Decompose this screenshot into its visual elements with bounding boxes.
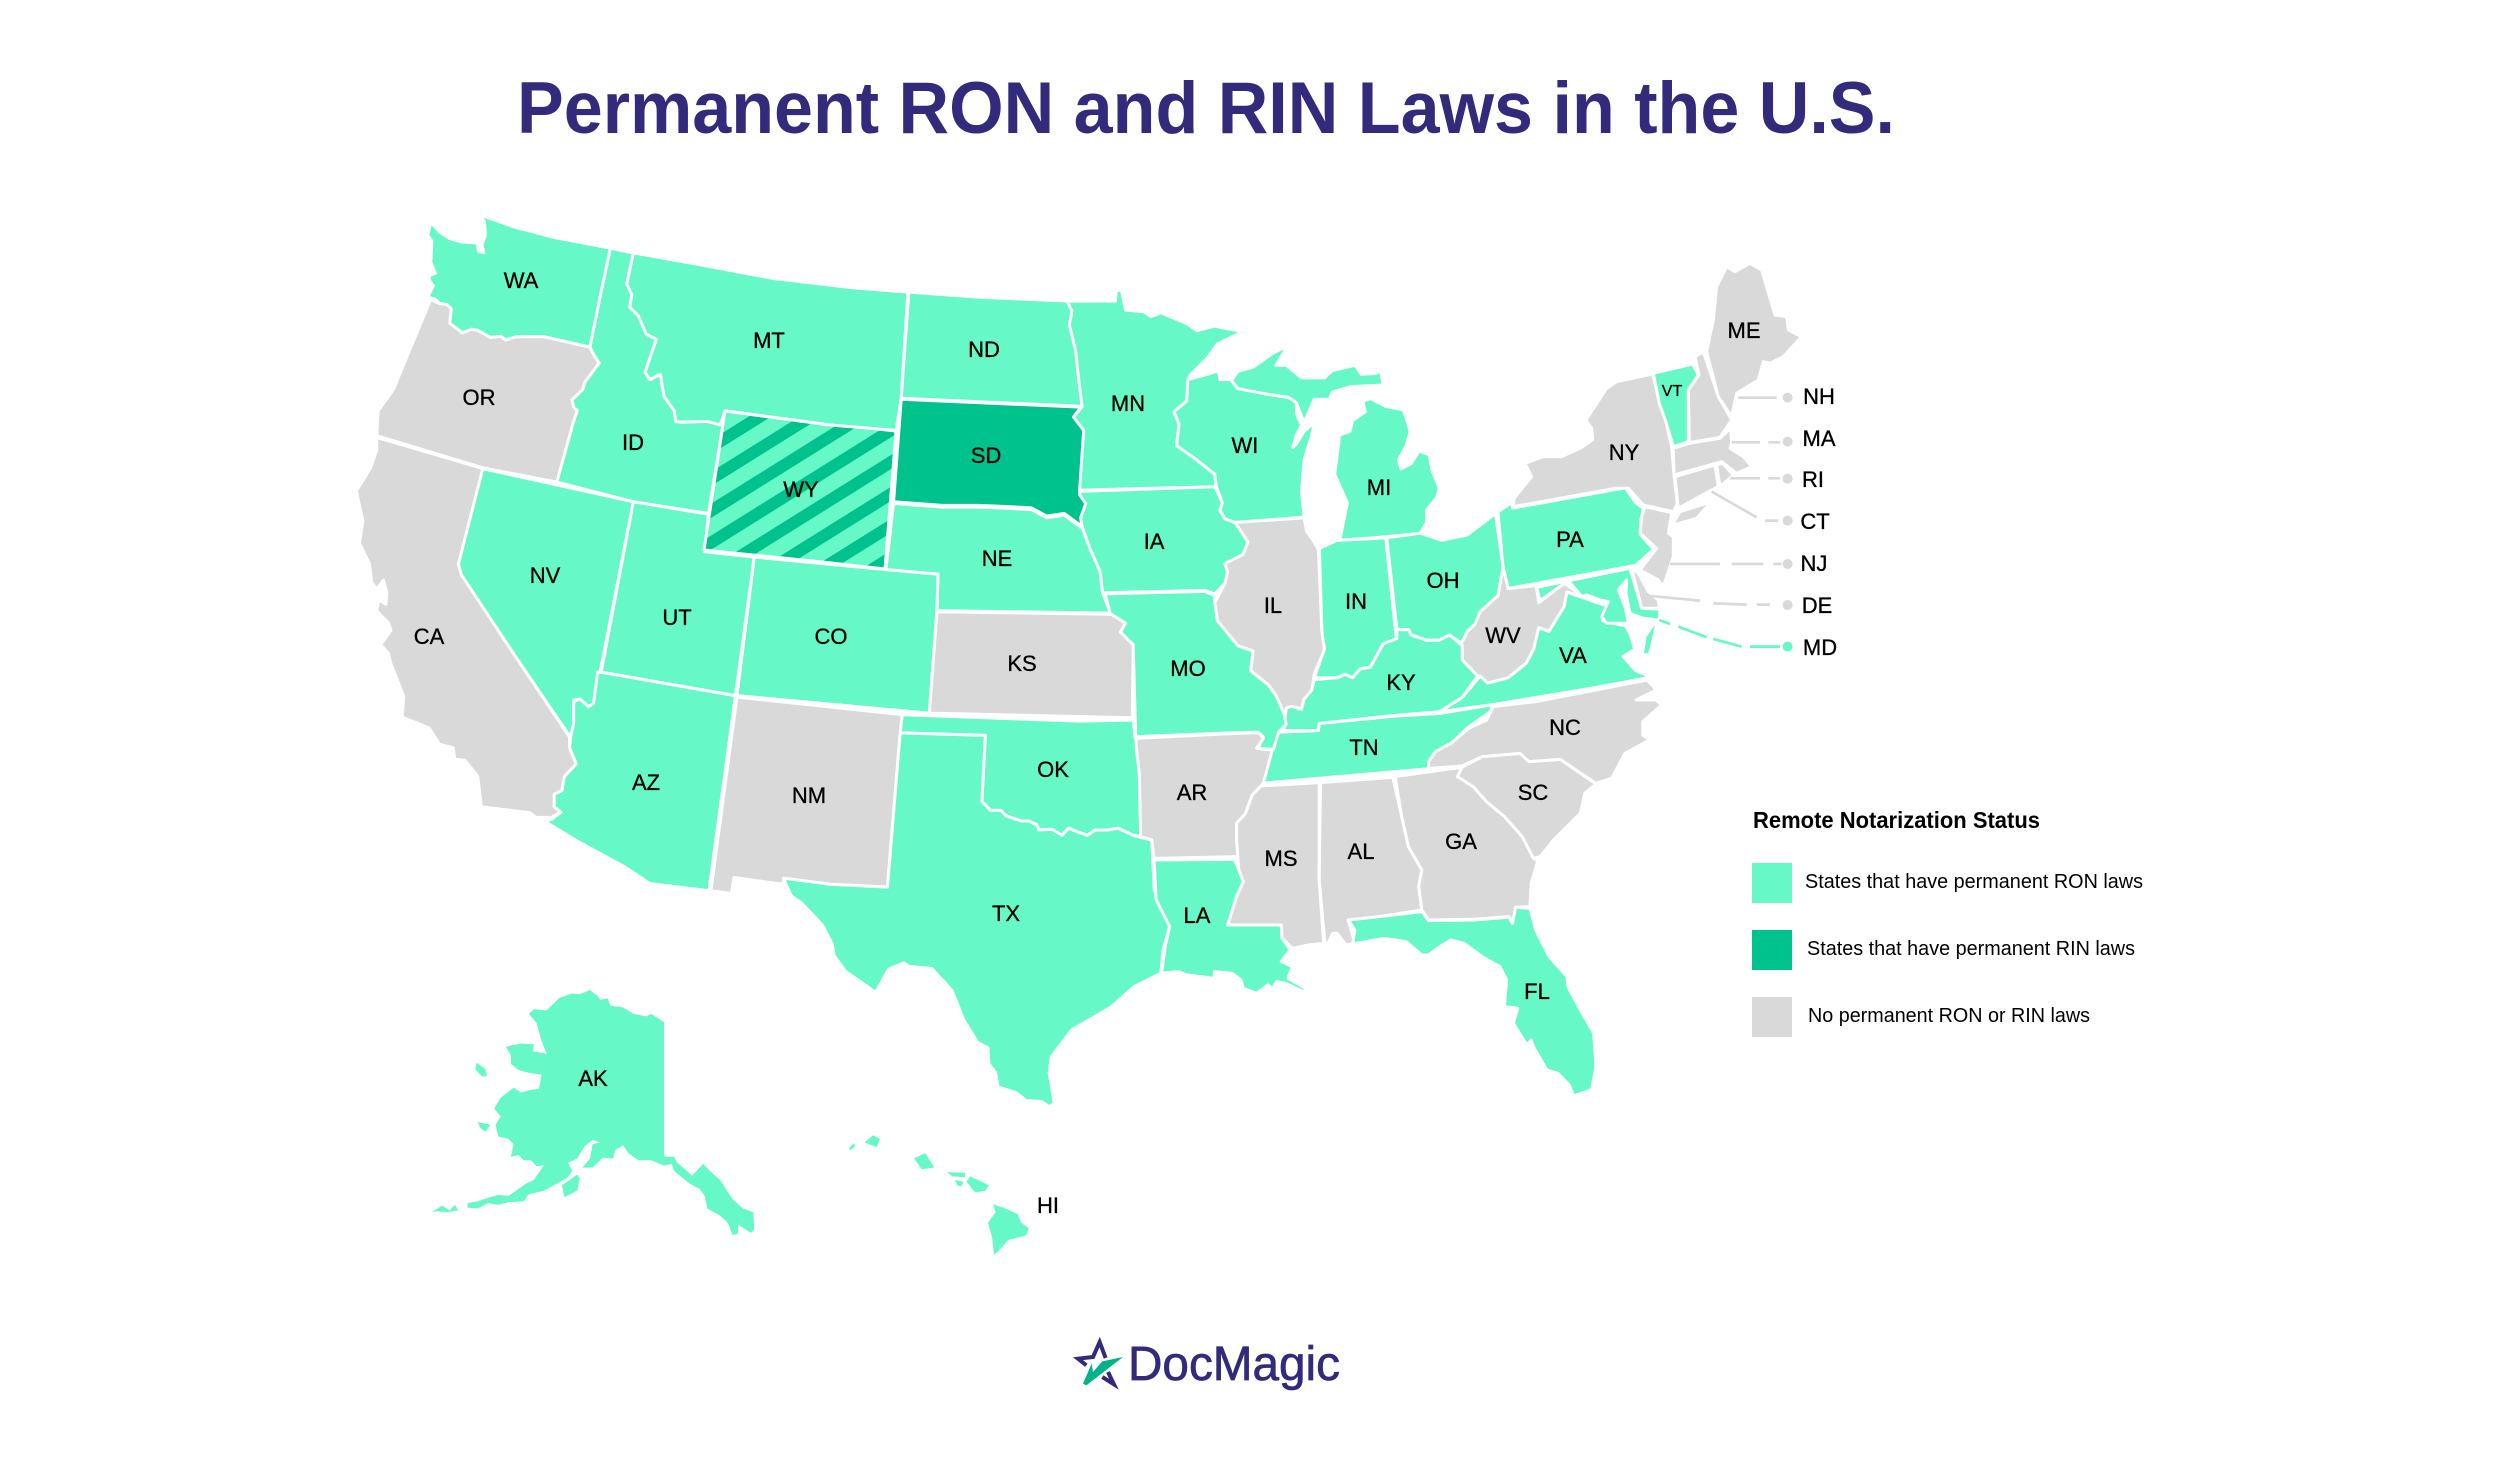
- state: AK: [432, 990, 754, 1235]
- state abbreviation labels: WY: [783, 477, 819, 502]
- state abbreviation labels: HI: [1037, 1193, 1059, 1218]
- icon: star with check mark: [1078, 1342, 1123, 1385]
- state: FL: [1348, 907, 1596, 1096]
- leader: MA: [1732, 437, 1793, 447]
- state abbreviation labels: MA: [1802, 426, 1836, 451]
- leader lines for small northeastern states: [1650, 393, 1793, 652]
- state: CO: [737, 557, 938, 713]
- leader: CT: [1712, 492, 1793, 526]
- state: OR: [377, 299, 599, 482]
- state: ME: [1707, 263, 1802, 417]
- leader: NH: [1738, 393, 1793, 403]
- state: AZ: [544, 672, 735, 891]
- state abbreviation labels: NH: [1803, 384, 1835, 409]
- state: AL: [1319, 777, 1422, 945]
- state abbreviation labels: CT: [1800, 509, 1830, 534]
- state abbreviation labels: ID: [622, 430, 644, 455]
- state: MS: [1228, 783, 1324, 948]
- state abbreviation labels: MT: [753, 328, 785, 353]
- state abbreviation labels: TX: [992, 901, 1020, 926]
- state: IN: [1314, 538, 1397, 678]
- state abbreviation labels: FL: [1524, 979, 1550, 1004]
- state: WV: [1461, 567, 1582, 683]
- legend item: RIN: [1752, 930, 2135, 970]
- state abbreviation labels: UT: [662, 605, 692, 630]
- state abbreviation labels: WI: [1232, 433, 1258, 458]
- state: IL: [1215, 518, 1324, 713]
- state: NV: [458, 469, 633, 737]
- state abbreviation labels: NV: [530, 563, 561, 588]
- state abbreviation labels: OR: [462, 385, 496, 410]
- state abbreviation labels: MO: [1170, 656, 1206, 681]
- state: MI: [1232, 346, 1439, 540]
- state abbreviation labels: AR: [1177, 780, 1207, 805]
- state abbreviation labels: OH: [1426, 568, 1460, 593]
- state: OH: [1387, 514, 1503, 644]
- state: NY: [1513, 374, 1712, 525]
- legend heading: Remote Notarization Status: [1753, 807, 2040, 833]
- state: WY: [704, 411, 896, 569]
- state: NE: [886, 504, 1110, 613]
- state: TX: [784, 733, 1170, 1107]
- state abbreviation labels: MN: [1111, 391, 1145, 416]
- state abbreviation labels: MD: [1803, 635, 1837, 660]
- state: OK: [900, 715, 1141, 837]
- state: DE: [1632, 568, 1659, 608]
- state abbreviation labels: AK: [578, 1066, 608, 1091]
- leader: RI: [1730, 474, 1793, 484]
- state: SD: [894, 399, 1086, 527]
- leader: DE: [1650, 596, 1793, 610]
- state: ID: [557, 248, 723, 514]
- state: MA: [1673, 428, 1752, 475]
- state abbreviation labels: WA: [504, 268, 539, 293]
- state abbreviation labels: ME: [1728, 318, 1760, 343]
- state abbreviation labels: SD: [971, 443, 1001, 468]
- state: VT: [1653, 364, 1698, 447]
- state abbreviation labels: AL: [1348, 839, 1374, 864]
- legend item: none: No permanent RON or RIN laws: [1808, 1005, 2090, 1027]
- state: NC: [1429, 680, 1662, 783]
- leader: MD: [1659, 620, 1793, 652]
- state: IA: [1080, 487, 1248, 594]
- state: NM: [711, 697, 902, 894]
- state abbreviation labels: SC: [1518, 780, 1548, 805]
- state: MN: [1067, 290, 1243, 490]
- state: MD: [1537, 568, 1660, 623]
- legend item: RON: States that have permanent RON laws: [1805, 871, 2143, 893]
- state: CT: [1675, 465, 1718, 508]
- state: AR: [1136, 733, 1272, 858]
- leader: NJ: [1670, 559, 1793, 569]
- state abbreviation labels: MS: [1264, 846, 1298, 871]
- DocMagic logo: [1078, 1338, 1340, 1391]
- state abbreviation labels: VT: [1662, 383, 1682, 400]
- state abbreviation labels: RI: [1802, 467, 1824, 492]
- state abbreviation labels: CO: [814, 624, 848, 649]
- state: WA: [428, 215, 610, 347]
- legend item: none: [1752, 997, 2090, 1037]
- state abbreviation labels: MI: [1367, 475, 1391, 500]
- state abbreviation labels: NJ: [1801, 551, 1827, 576]
- state: TN: [1263, 705, 1493, 783]
- state: KS: [929, 612, 1133, 718]
- state abbreviation labels: IN: [1345, 589, 1367, 614]
- state abbreviation labels: GA: [1445, 829, 1477, 854]
- state abbreviation labels: PA: [1556, 527, 1584, 552]
- state abbreviation labels: NY: [1609, 440, 1640, 465]
- state: CA: [356, 437, 576, 817]
- state: NJ: [1640, 507, 1673, 587]
- state abbreviation labels: NC: [1549, 715, 1581, 740]
- state abbreviation labels: DE: [1802, 593, 1832, 618]
- state abbreviation labels: KS: [1007, 651, 1037, 676]
- state abbreviation labels: OK: [1037, 757, 1069, 782]
- state abbreviation labels: IL: [1264, 593, 1282, 618]
- state: HI: [849, 1135, 1029, 1255]
- state abbreviation labels: NE: [982, 546, 1012, 571]
- legend item: RIN: States that have permanent RIN laws: [1807, 938, 2135, 960]
- state: VA: [1439, 592, 1651, 712]
- state abbreviation labels: NM: [792, 783, 826, 808]
- state: PA: [1498, 488, 1654, 589]
- state abbreviation labels: LA: [1184, 903, 1211, 928]
- map of U.S. states: [356, 215, 1802, 1255]
- state abbreviation labels: AZ: [632, 770, 660, 795]
- Delmarva tip of VA: [1644, 625, 1655, 653]
- state: SC: [1458, 753, 1596, 858]
- state: MO: [1105, 591, 1286, 749]
- state: LA: [1154, 859, 1306, 993]
- state: GA: [1395, 767, 1538, 923]
- state: NH: [1688, 352, 1732, 443]
- legend: Remote Notarization Status: [1752, 807, 2143, 1037]
- wordmark: DocMagic: [1128, 1338, 1340, 1391]
- state: ND: [901, 292, 1082, 406]
- state abbreviation labels: ND: [968, 337, 1000, 362]
- state: KY: [1284, 630, 1478, 731]
- state abbreviation labels: [414, 268, 1837, 1218]
- state abbreviation labels: KY: [1386, 670, 1416, 695]
- title: Permanent RON and RIN Laws in the U.S.: [517, 68, 1895, 149]
- state abbreviation labels: TN: [1349, 735, 1379, 760]
- state: UT: [601, 502, 754, 696]
- state: WI: [1174, 371, 1314, 522]
- legend item: RON: [1752, 863, 2143, 903]
- state abbreviation labels: WV: [1485, 623, 1521, 648]
- state abbreviation labels: CA: [414, 624, 445, 649]
- state abbreviation labels: IA: [1144, 529, 1165, 554]
- state: RI: [1717, 463, 1733, 487]
- state: MT: [627, 253, 908, 430]
- state abbreviation labels: VA: [1559, 643, 1587, 668]
